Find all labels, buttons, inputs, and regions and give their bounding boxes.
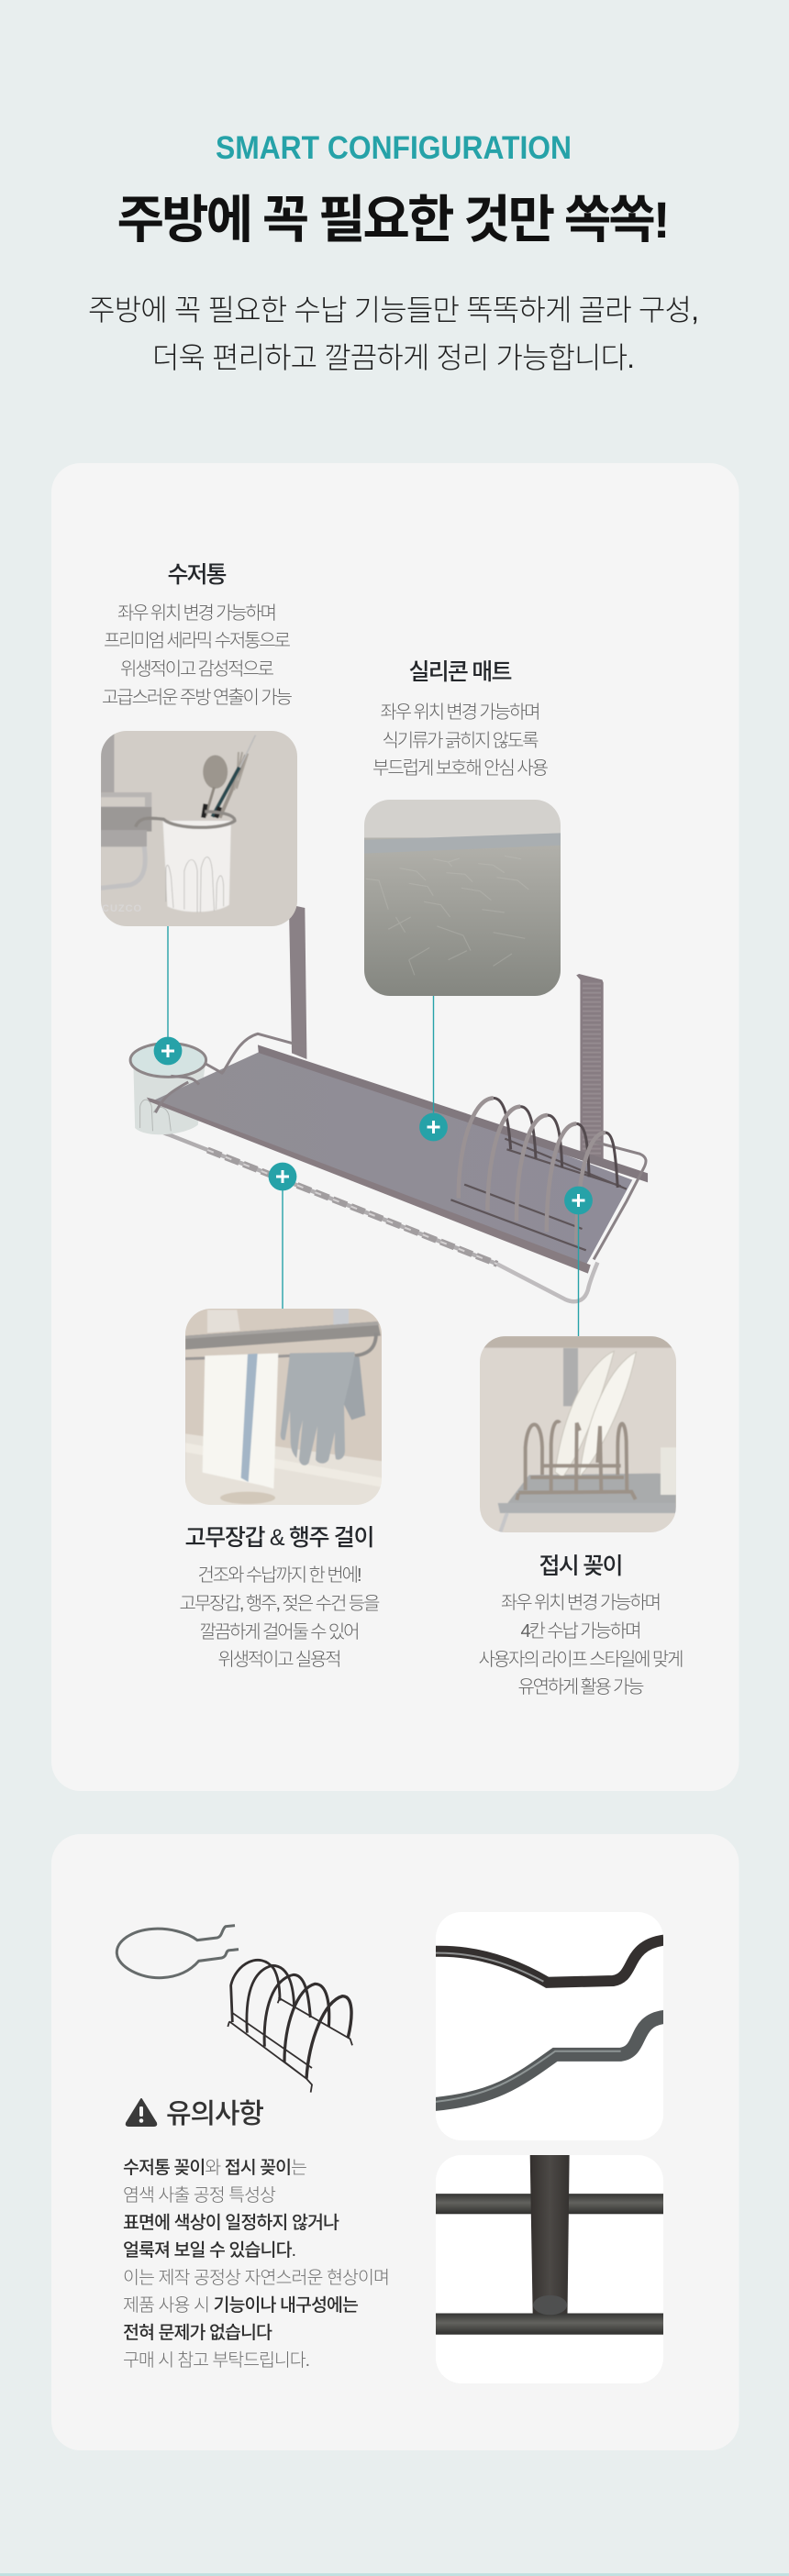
text: silicone mat: 좌우 위치 변경 가능하며 [380,702,541,723]
text: cutlery holder: 프리미엄 세라믹 수저통으로 [104,630,291,651]
text: dish rack: 4칸 수납 가능하며 [521,1620,642,1642]
bottom accent strip [0,2573,789,2576]
plate rack [450,1098,627,1250]
shelf surface [153,1052,632,1268]
shelf back rim [258,1045,648,1182]
heading: cutlery holder: 수저통 [167,562,228,588]
hotspot: cutlery holder [154,1037,182,1065]
text: dish rack [479,1592,684,1697]
text: gloves and towel: 건조와 수납까지 한 번에! [198,1564,361,1586]
dish rack part [228,1960,352,2093]
photo: holder ring close-up [433,1912,665,2140]
text: cutlery holder: 위생적이고 감성적으로 [120,658,274,680]
hotspot: dish rack [564,1187,593,1214]
text: caution notes: 얼룩져 보일 수 있습니다. [123,2240,296,2261]
text: gloves and towel: 고무장갑, 행주, 젖은 수건 등을 [180,1593,380,1614]
logo on shelf: CUZCO [102,903,142,914]
text: dish rack: 좌우 위치 변경 가능하며 [501,1592,661,1613]
text: gloves and towel: 깔끔하게 걸어둘 수 있어 [200,1621,360,1642]
photo: silicone mat [362,798,562,1000]
photo: gloves and towel [183,1307,385,1509]
panel: product configuration [51,463,739,1791]
hotspot: towel bar [269,1163,296,1190]
text: caution notes: 구매 시 참고 부탁드립니다. [123,2350,310,2371]
rack product illustration [130,906,648,1301]
text: caution notes: 수저통 꽂이와 접시 꽂이는 [123,2158,307,2178]
holder ring [117,1926,239,1978]
heading: dish rack: 접시 꽂이 [539,1553,624,1579]
text: gloves and towel [180,1564,380,1670]
photo: weld close-up [433,2155,665,2383]
text: caution notes: 제품 사용 시 기능이나 내구성에는 [123,2295,359,2316]
back post right [576,974,604,1162]
text: cutlery holder: 좌우 위치 변경 가능하며 [117,603,277,624]
text: gloves and towel: 위생적이고 실용적 [218,1649,341,1670]
text: dish rack: 유연하게 활용 가능 [517,1676,644,1697]
panel: caution [51,1834,739,2450]
text: silicone mat: 부드럽게 보호해 안심 사용 [372,757,549,779]
text: cutlery holder: 고급스러운 주방 연출이 가능 [102,687,293,708]
heading: caution: 유의사항 [166,2099,264,2129]
text: silicone mat: 식기류가 긁히지 않도록 [382,730,539,751]
towel bar [154,1112,597,1301]
text: caution notes: 표면에 색상이 일정하지 않거나 [123,2213,339,2233]
connector lines [168,925,578,1337]
icon: warning triangle [127,2099,156,2126]
photo: cutlery holder [93,727,302,929]
title: 주방에 꼭 필요한 것만 쏙쏙! [117,191,670,249]
heading: gloves and towel: 고무장갑 & 행주 걸이 [185,1525,374,1551]
product parts: holder ring and dish rack [117,1926,352,2093]
subtitle: 주방에 꼭 필요한 수납 기능들만 똑똑하게 골라 구성, [88,293,699,326]
shelf front rim [147,1098,591,1274]
text: caution notes: 염색 사출 공정 특성상 [123,2185,276,2206]
heading: silicone mat: 실리콘 매트 [409,659,512,685]
text: cutlery holder [102,603,293,708]
side rails [155,1034,646,1259]
hotspot: silicone mat [419,1113,448,1141]
text: silicone mat [372,702,549,779]
utensil holder [130,1044,206,1134]
subtitle: 더욱 편리하고 깔끔하게 정리 가능합니다. [152,341,635,374]
back post left [289,906,306,1059]
text: caution notes: 전혀 문제가 없습니다 [123,2323,272,2343]
section label: SMART CONFIGURATION [216,130,572,166]
text: caution notes: 이는 제작 공정상 자연스러운 현상이며 [123,2268,390,2288]
text: dish rack: 사용자의 라이프 스타일에 맞게 [479,1649,684,1670]
text: caution notes [123,2158,390,2371]
photo: dish rack [477,1334,679,1536]
subtitle [88,293,699,374]
